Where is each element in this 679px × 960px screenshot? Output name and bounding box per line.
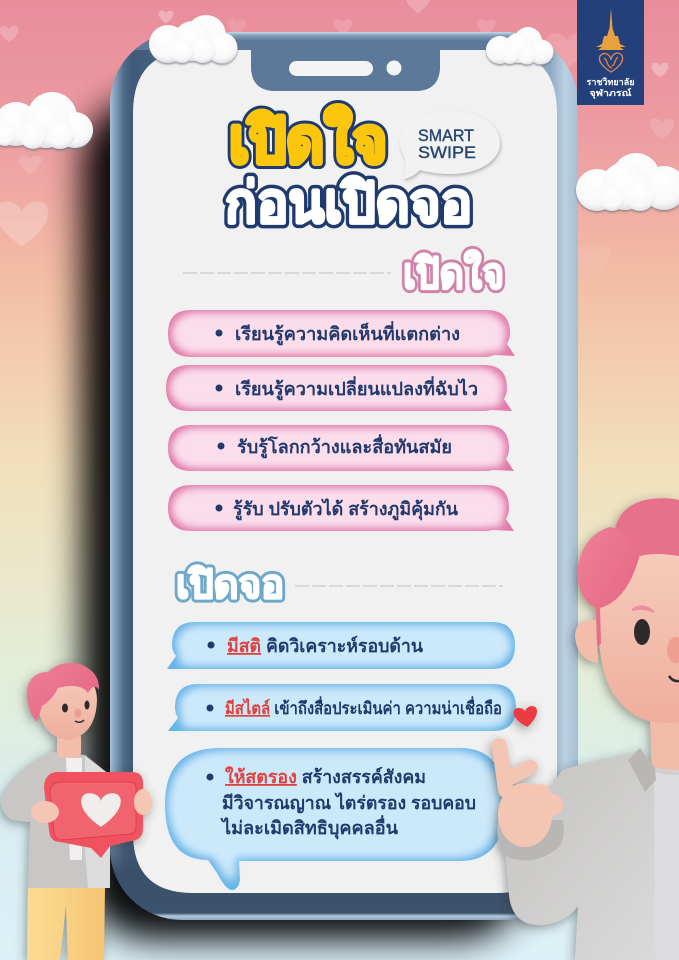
right hand	[134, 789, 152, 815]
cloud: left	[0, 92, 93, 149]
red heart board	[44, 772, 143, 858]
section heading: เปิดจอ: เปิดจอ	[176, 563, 284, 607]
hair	[27, 663, 99, 722]
character: left man holding heart sign	[1, 663, 152, 960]
logo: college badge	[577, 0, 644, 105]
title: เปิดใจ: เปิดใจ	[229, 105, 387, 176]
panel: เปิดใจ bullet list	[166, 310, 515, 531]
shirt	[66, 758, 82, 860]
panel: phone frame	[110, 32, 578, 920]
title: เปิดใจ: เปิดใจ	[229, 105, 387, 176]
torso and sleeve	[505, 752, 679, 960]
pink bubble 3: รับรู้โลกกว้างและสื่อทันสมัย	[237, 434, 452, 459]
head	[36, 668, 97, 740]
logo text: ราชวิทยาลัย	[586, 77, 634, 87]
shirt	[654, 772, 679, 960]
phone drop shadow	[82, 95, 528, 940]
ear	[575, 620, 598, 663]
blue bubble 2	[168, 684, 516, 731]
cloud: top left	[149, 15, 238, 64]
pink bubble 4: รู้รับ ปรับตัวได้ สร้างภูมิคุ้มกัน	[233, 498, 459, 521]
title: ก่อนเปิดจอ: ก่อนเปิดจอ	[225, 171, 472, 234]
section heading: เปิดจอ: เปิดจอ	[176, 563, 284, 607]
trousers	[27, 885, 105, 960]
white heart	[81, 793, 121, 827]
neck	[57, 732, 81, 758]
jacket front panel	[84, 756, 110, 888]
cloud: top right	[486, 27, 554, 64]
eye	[634, 619, 650, 645]
red heart	[513, 705, 539, 729]
section heading: เปิดจอ	[176, 563, 503, 607]
hair side	[578, 527, 640, 646]
pink bubble 4	[168, 485, 514, 531]
cuff	[497, 820, 564, 860]
mouth	[669, 676, 679, 681]
panel: เปิดจอ bullet list	[165, 622, 516, 890]
pink bubble 1	[168, 310, 515, 357]
hand	[491, 737, 563, 847]
decorative background hearts	[0, 0, 674, 278]
pink bubble 3	[168, 425, 514, 471]
character: large right man with finger heart	[491, 498, 679, 960]
face	[598, 544, 679, 723]
cloud: right	[576, 153, 679, 211]
collar	[628, 748, 656, 792]
phone screen	[133, 50, 557, 893]
section heading: เปิดใจ: เปิดใจ	[403, 249, 504, 297]
pink bubble 1: เรียนรู้ความคิดเห็นที่แตกต่าง	[235, 321, 460, 346]
blue bubble 3	[165, 748, 505, 890]
eyebrow	[632, 606, 654, 612]
pink bubble 2	[166, 365, 512, 411]
badge: smart swipe speech bubble: SMART	[418, 126, 474, 145]
hair top	[615, 498, 679, 556]
badge: smart swipe speech bubble	[400, 111, 500, 179]
blue bubble 1: มีสติ คิดวิเคราะห์รอบด้าน	[227, 635, 424, 656]
section heading: เปิดใจ: เปิดใจ	[403, 249, 504, 297]
blue bubble 1	[167, 622, 515, 669]
notch speaker	[289, 61, 373, 76]
jacket	[1, 752, 110, 888]
left hand	[31, 801, 59, 823]
nose	[667, 637, 679, 663]
notch fill	[251, 49, 440, 91]
icon: golden spire	[596, 8, 626, 50]
pink bubble 2: เรียนรู้ความเปลี่ยนแปลงที่ฉับไว	[235, 376, 478, 401]
eyes and mouth	[62, 700, 90, 722]
neck	[650, 715, 679, 780]
nose	[74, 708, 82, 718]
title: ก่อนเปิดจอ: ก่อนเปิดจอ	[225, 171, 472, 234]
blue bubble 3: มีวิจารณญาณ ไตร่ตรอง รอบคอบ	[222, 792, 476, 814]
blue bubble 2: มีสไตล์ เข้าถึงสื่อประเมินค่า ความน่าเชื่อถือ	[225, 696, 502, 718]
icon: monogram	[599, 53, 623, 72]
blue bubble 3: ไม่ละเมิดสิทธิบุคคลอื่น	[220, 815, 399, 840]
notch camera	[386, 60, 402, 76]
badge: smart swipe speech bubble: SWIPE	[418, 143, 476, 162]
section heading: เปิดใจ	[183, 249, 504, 297]
logo: college badge: จุฬาภรณ์	[590, 87, 632, 99]
blue bubble 3: ให้สตรอง สร้างสรรค์สังคม	[225, 766, 426, 787]
